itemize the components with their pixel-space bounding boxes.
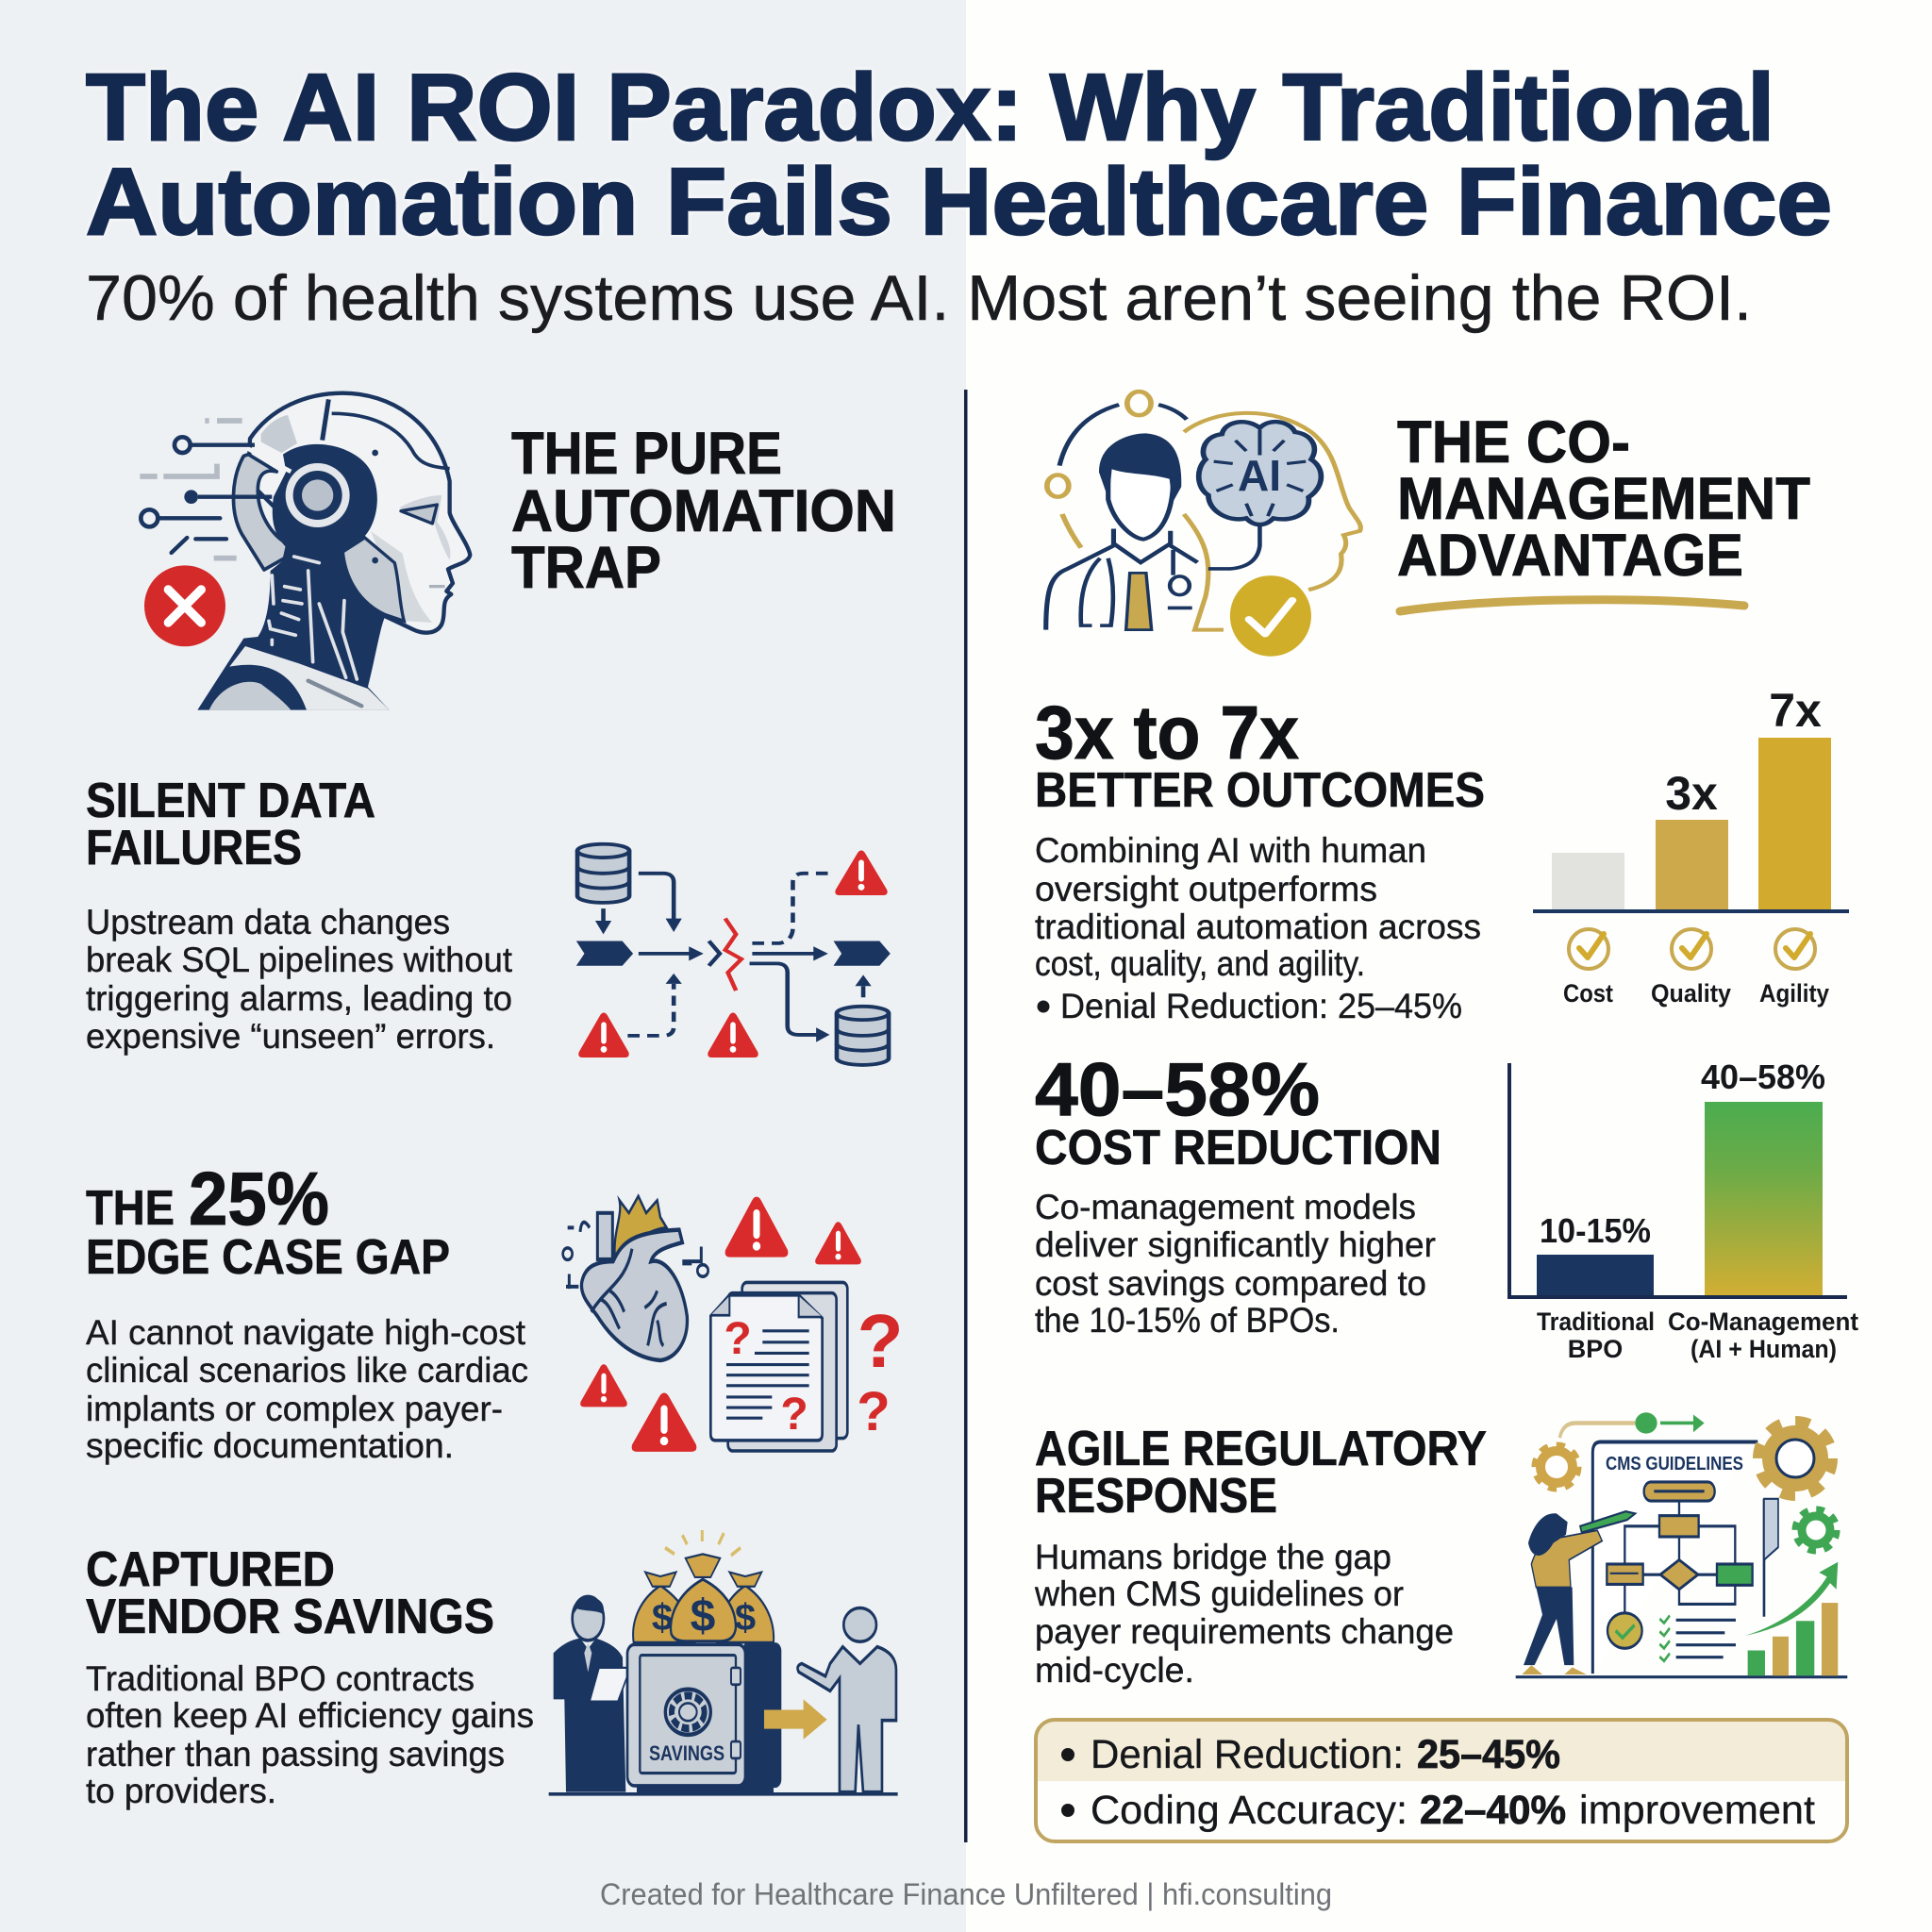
title: Automation Fails Healthcare Finance — [86, 149, 1832, 255]
text block: agile regulatory response: Humans bridge the gap — [1035, 1538, 1391, 1576]
text block: agile regulatory response: mid-cycle. — [1035, 1651, 1194, 1690]
stat block: 40–58% cost reduction: Co-management models — [1035, 1188, 1416, 1226]
icon: heart, documents and warnings — [563, 1196, 903, 1452]
callout: key metrics — [1036, 1720, 1847, 1841]
stat block: 3x to 7x better outcomes: Combining AI with human — [1035, 831, 1426, 870]
bar chart: cost quality agility: 3x — [1665, 767, 1718, 820]
stat block: 3x to 7x better outcomes: oversight outperforms — [1035, 870, 1377, 908]
bar chart: bpo vs co-management: Co-Management — [1668, 1307, 1858, 1336]
stat block: 3x to 7x better outcomes: BETTER OUTCOMES — [1035, 763, 1485, 818]
text block: the 25% edge case gap — [86, 1157, 528, 1465]
footer credit: Created for Healthcare Finance Unfiltered | hfi.consulting — [600, 1877, 1332, 1911]
bar chart: bpo vs co-management — [1509, 1058, 1858, 1363]
icon: cms guidelines flowchart — [1516, 1412, 1847, 1677]
background: right panel — [966, 0, 1932, 1932]
heading underline — [1400, 600, 1744, 611]
text block: captured vendor savings: often keep AI efficiency gains — [86, 1696, 534, 1735]
text block: the 25% edge case gap: implants or complex payer- — [86, 1390, 503, 1428]
text block: silent data failures: expensive “unseen” errors. — [86, 1017, 495, 1056]
text block: agile regulatory response — [1034, 1422, 1487, 1690]
background: left panel — [0, 0, 966, 1932]
subtitle: 70% of health systems use AI. Most aren’t seeing the ROI. — [86, 262, 1752, 334]
text block: the 25% edge case gap: specific documentation. — [86, 1426, 454, 1465]
callout: key metrics: 25–45% — [1417, 1732, 1560, 1777]
heading: the co-management advantage: ADVANTAGE — [1397, 523, 1743, 589]
icon: vendor, safe, money bags and provider: $ — [652, 1597, 673, 1639]
icon: heart, documents and warnings: ? — [857, 1381, 891, 1442]
icon: heart, documents and warnings: ? — [858, 1299, 903, 1383]
bar chart: bpo vs co-management: (AI + Human) — [1690, 1335, 1837, 1363]
text block: agile regulatory response: when CMS guidelines or — [1034, 1574, 1404, 1613]
text block: captured vendor savings: VENDOR SAVINGS — [86, 1590, 494, 1644]
text block: the 25% edge case gap: clinical scenarios like cardiac — [86, 1351, 528, 1390]
title — [86, 55, 1832, 255]
icon: vendor, safe, money bags and provider: $ — [691, 1591, 716, 1641]
callout: key metrics: 22–40% — [1420, 1788, 1566, 1833]
text block: silent data failures: Upstream data changes — [86, 903, 450, 941]
icon: doctor with AI brain — [1046, 391, 1360, 657]
bar chart: cost quality agility: Cost — [1563, 979, 1613, 1008]
icon: heart, documents and warnings: ? — [724, 1314, 752, 1364]
text block: captured vendor savings: Traditional BPO contracts — [86, 1659, 475, 1698]
stat block: 40–58% cost reduction: the 10-15% of BPOs. — [1035, 1301, 1340, 1340]
bar chart: bpo vs co-management: 10-15% — [1540, 1211, 1651, 1250]
stat block: 40–58% cost reduction: COST REDUCTION — [1035, 1121, 1441, 1175]
stat block: 3x to 7x better outcomes — [1035, 691, 1485, 1025]
text block: silent data failures — [86, 774, 513, 1056]
text block: captured vendor savings: CAPTURED — [86, 1542, 335, 1597]
stat block: 40–58% cost reduction: cost savings compared to — [1035, 1264, 1426, 1303]
stat block: 3x to 7x better outcomes: cost, quality, and agility. — [1035, 944, 1365, 983]
bar chart: cost quality agility: Agility — [1759, 979, 1829, 1008]
text block: the 25% edge case gap: AI cannot navigate high-cost — [86, 1313, 526, 1352]
text block: the 25% edge case gap: 25% — [189, 1157, 329, 1241]
text block: agile regulatory response: AGILE REGULATORY — [1035, 1422, 1487, 1476]
icon: doctor with AI brain: AI — [1238, 451, 1281, 500]
text block: agile regulatory response: payer requirements change — [1035, 1612, 1454, 1651]
bar chart: bpo vs co-management: 40–58% — [1701, 1058, 1825, 1096]
icon: cms guidelines flowchart: CMS GUIDELINES — [1606, 1454, 1743, 1474]
heading: the pure automation trap: AUTOMATION — [511, 478, 896, 544]
heading: the pure automation trap: THE PURE — [511, 421, 782, 487]
callout: key metrics: Denial Reduction: — [1091, 1732, 1404, 1777]
icon: heart, documents and warnings: ? — [780, 1390, 808, 1440]
text block: the 25% edge case gap: THE — [86, 1181, 175, 1236]
text block: captured vendor savings: rather than passing savings — [86, 1735, 505, 1774]
text block: agile regulatory response: RESPONSE — [1035, 1469, 1277, 1524]
stat block: 3x to 7x better outcomes: traditional automation across — [1035, 908, 1481, 946]
heading: the co-management advantage: THE CO- — [1397, 409, 1630, 475]
heading: the co-management advantage: MANAGEMENT — [1397, 466, 1810, 532]
heading: the pure automation trap — [511, 421, 896, 601]
center divider — [964, 390, 968, 1842]
bar chart: bpo vs co-management: Traditional — [1537, 1307, 1655, 1336]
stat block: 40–58% cost reduction — [1035, 1047, 1441, 1340]
icon: vendor, safe, money bags and provider: $ — [735, 1597, 756, 1639]
stat block: 40–58% cost reduction: deliver significantly higher — [1035, 1225, 1436, 1264]
stat block: 3x to 7x better outcomes: 3x to 7x — [1035, 691, 1299, 774]
text block: silent data failures: SILENT DATA — [86, 774, 375, 828]
text block: captured vendor savings: to providers. — [86, 1772, 276, 1810]
stat block: 3x to 7x better outcomes: Denial Reduction: 25–45% — [1060, 987, 1462, 1025]
text block: the 25% edge case gap: EDGE CASE GAP — [86, 1230, 450, 1285]
title: The AI ROI Paradox: Why Traditional — [86, 55, 1774, 160]
text block: silent data failures: FAILURES — [86, 821, 302, 875]
icon: vendor, safe, money bags and provider: SAVINGS — [649, 1741, 724, 1765]
icon: vendor, safe, money bags and provider — [549, 1530, 898, 1794]
text block: silent data failures: break SQL pipelines without — [86, 941, 513, 979]
callout: key metrics: improvement — [1579, 1788, 1815, 1833]
callout: key metrics: Coding Accuracy: — [1091, 1788, 1407, 1833]
heading: the pure automation trap: TRAP — [511, 535, 661, 601]
icon: broken data pipeline — [576, 844, 891, 1065]
bar chart: cost quality agility: Quality — [1651, 979, 1731, 1008]
text block: captured vendor savings — [86, 1542, 534, 1810]
heading: the co-management advantage — [1397, 409, 1810, 589]
text block: silent data failures: triggering alarms, leading to — [86, 979, 512, 1018]
bar chart: bpo vs co-management: BPO — [1568, 1335, 1623, 1363]
stat block: 40–58% cost reduction: 40–58% — [1035, 1047, 1320, 1131]
icon: robot head with red x — [140, 393, 470, 710]
bar chart: cost quality agility: 7x — [1769, 684, 1822, 737]
bar chart: cost quality agility — [1533, 684, 1849, 1008]
